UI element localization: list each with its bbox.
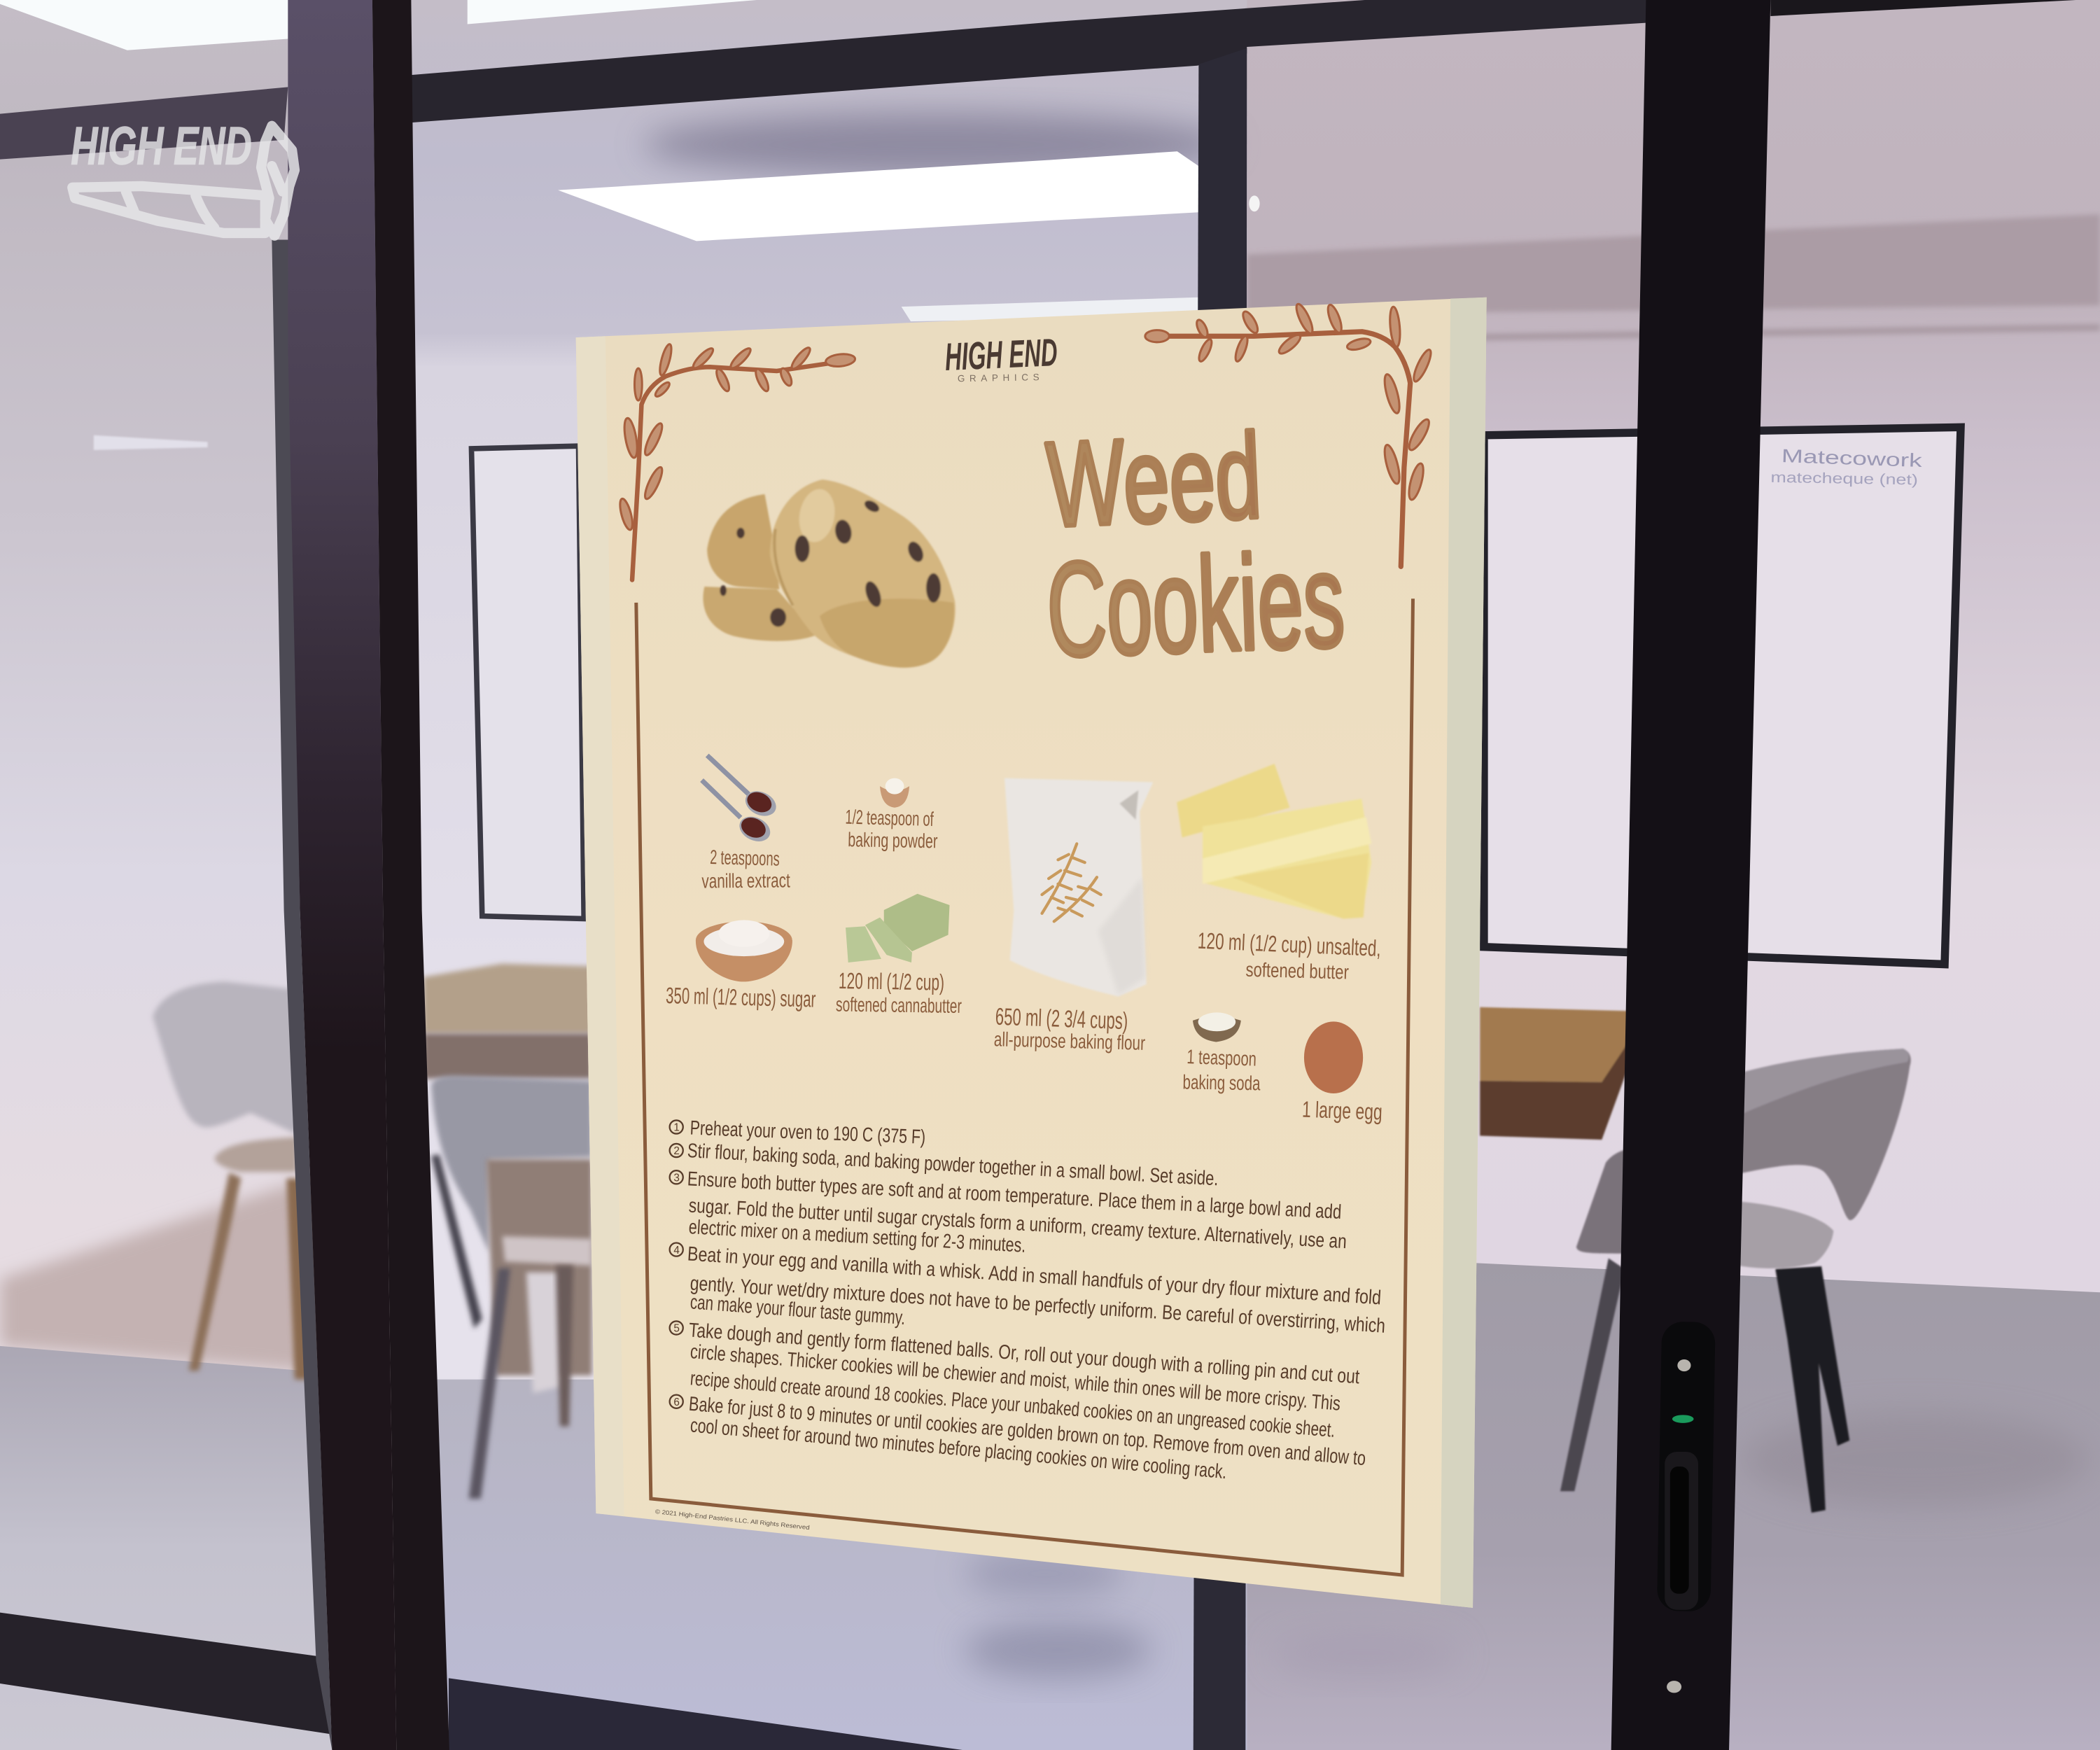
step 6: Bake for just 8 to 9 minutes or until cookies are golden brown on top. Remove from oven and allow to xyxy=(688,1393,1366,1470)
left horizontal bar xyxy=(0,87,288,160)
icon: butter sticks xyxy=(1177,764,1371,918)
step 3: sugar. Fold the butter until sugar crystals form a uniform, creamy texture. Alternatively, use an xyxy=(688,1195,1348,1253)
top bar right of the door xyxy=(1770,0,2076,16)
ingredient: egg: 1 large egg xyxy=(1301,1097,1382,1125)
title: Weed xyxy=(1044,409,1264,552)
step 2: 2 xyxy=(673,1145,680,1157)
step 6: 6 xyxy=(673,1396,680,1408)
left door post, lit face xyxy=(288,0,396,1750)
icon: flour bag xyxy=(1004,778,1153,996)
ingredient: unsalted butter: softened butter xyxy=(1245,959,1350,984)
right chair xyxy=(1560,1049,1911,1513)
top horizontal bar xyxy=(411,0,1647,122)
step 4: Beat in your egg and vanilla with a whisk. Add in small handfuls of your dry flour mixture and fold xyxy=(687,1242,1382,1309)
ingredient: vanilla extract xyxy=(701,755,790,892)
icon: bowl of baking soda xyxy=(1193,1012,1241,1042)
illustration: chocolate chip cookies xyxy=(703,479,955,668)
icon: brown egg xyxy=(1304,1021,1363,1093)
step 5: circle shapes. Thicker cookies will be chewier and moist, while thin ones will be more crispy. This xyxy=(690,1340,1341,1415)
left vertical strip beside the post xyxy=(272,239,332,1750)
top right leafy branch xyxy=(1145,302,1434,566)
ingredient: sugar: 350 ml (1/2 cups) sugar xyxy=(666,983,816,1012)
ingredient: unsalted butter xyxy=(1177,764,1382,984)
step 1 xyxy=(670,1117,926,1149)
ingredient: flour: all-purpose baking flour xyxy=(993,1028,1146,1055)
recipe steps xyxy=(670,1117,1386,1483)
poster sheet xyxy=(576,298,1487,1608)
step 5 xyxy=(670,1319,1360,1442)
left door post, dark xyxy=(372,0,449,1750)
ingredient: sugar xyxy=(666,920,816,1012)
whiteboards on the back wall: Matecowork xyxy=(1781,445,1923,471)
step 3: Ensure both butter types are soft and at room temperature. Place them in a large bowl and add xyxy=(687,1168,1342,1224)
tables and chairs in the room xyxy=(153,964,1911,1513)
step 3 xyxy=(670,1168,1348,1257)
ingredient: baking soda: baking soda xyxy=(1182,1071,1261,1095)
step 3: electric mixer on a medium setting for 2-3 minutes. xyxy=(688,1216,1026,1257)
brand logo: HIGH END xyxy=(944,330,1058,379)
ingredient: vanilla extract: vanilla extract xyxy=(701,869,790,892)
copyright line: © 2021 High-End Pastries LLC. All Rights Reserved xyxy=(654,1508,810,1531)
step 5: Take dough and gently form flattened balls. Or, roll out your dough with a rolling pin and cut out xyxy=(688,1319,1360,1388)
centre table and chair xyxy=(424,964,592,1499)
step 1: 1 xyxy=(673,1122,680,1134)
right table xyxy=(1480,1007,1637,1140)
title xyxy=(1044,409,1347,685)
door lock hardware xyxy=(1657,1322,1716,1693)
ingredient: baking soda xyxy=(1182,1012,1261,1095)
ingredient: baking powder xyxy=(845,778,938,853)
ingredient: flour: 650 ml (2 3/4 cups) xyxy=(995,1004,1128,1035)
lower centre horizontal bar xyxy=(449,1678,965,1750)
ingredient: cannabutter: 120 ml (1/2 cup) xyxy=(839,968,944,995)
right door post xyxy=(1611,0,1770,1750)
centre mullion xyxy=(1194,48,1247,1750)
ceiling lights xyxy=(0,0,1260,321)
ingredient: vanilla extract: 2 teaspoons xyxy=(710,846,780,871)
ingredient: egg xyxy=(1301,1021,1382,1125)
brand logo: GRAPHICS xyxy=(958,372,1040,384)
step 4: 4 xyxy=(673,1245,680,1256)
poster frame line xyxy=(636,598,1413,1575)
icon: two teaspoons xyxy=(702,755,780,846)
step 6: cool on sheet for around two minutes before placing cookies on wire cooling rack. xyxy=(690,1414,1228,1483)
lower left horizontal bar xyxy=(0,1613,332,1735)
left reflected chair and table xyxy=(153,981,316,1380)
step 2 xyxy=(670,1140,1219,1190)
whiteboards on the back wall xyxy=(471,427,1961,965)
icon: small bowl of baking powder xyxy=(880,778,909,808)
ingredient: baking powder: 1/2 teaspoon of xyxy=(845,806,934,831)
step 5: recipe should create around 18 cookies. Place your unbaked cookies on an ungreased cookie sheet. xyxy=(690,1367,1336,1442)
ingredient: flour xyxy=(993,778,1153,1055)
step 2: Stir flour, baking soda, and baking powder together in a small bowl. Set aside. xyxy=(687,1140,1219,1190)
step 4 xyxy=(670,1242,1386,1338)
step 3: 3 xyxy=(673,1172,680,1184)
ingredient: baking powder: baking powder xyxy=(848,829,938,853)
poster xyxy=(576,298,1487,1608)
icon: bowl of sugar xyxy=(696,920,792,981)
step 5: 5 xyxy=(673,1323,680,1335)
ingredient: cannabutter: softened cannabutter xyxy=(836,994,962,1018)
watermark wordmark: HIGH END xyxy=(71,116,252,176)
step 1: Preheat your oven to 190 C (375 F) xyxy=(690,1117,926,1149)
watermark logo xyxy=(71,116,295,236)
ingredient: cannabutter xyxy=(836,894,962,1018)
whiteboards on the back wall: matecheque (net) xyxy=(1770,470,1918,488)
top left leafy branch xyxy=(617,343,855,580)
ingredient: unsalted butter: 120 ml (1/2 cup) unsalted, xyxy=(1197,928,1382,961)
brand logo xyxy=(944,330,1058,384)
step 4: can make your flour taste gummy. xyxy=(690,1291,906,1329)
step 4: gently. Your wet/dry mixture does not have to be perfectly uniform. Be careful of overstirring, which xyxy=(690,1273,1386,1338)
ingredient: baking soda: 1 teaspoon xyxy=(1186,1046,1256,1071)
right translucent margin xyxy=(1441,298,1487,1608)
icon: rolled joint xyxy=(72,126,295,236)
icon: wheat on bag xyxy=(1042,844,1101,921)
title: Cookies xyxy=(1044,525,1347,685)
left translucent margin xyxy=(576,336,624,1516)
icon: green butter block xyxy=(846,894,950,962)
